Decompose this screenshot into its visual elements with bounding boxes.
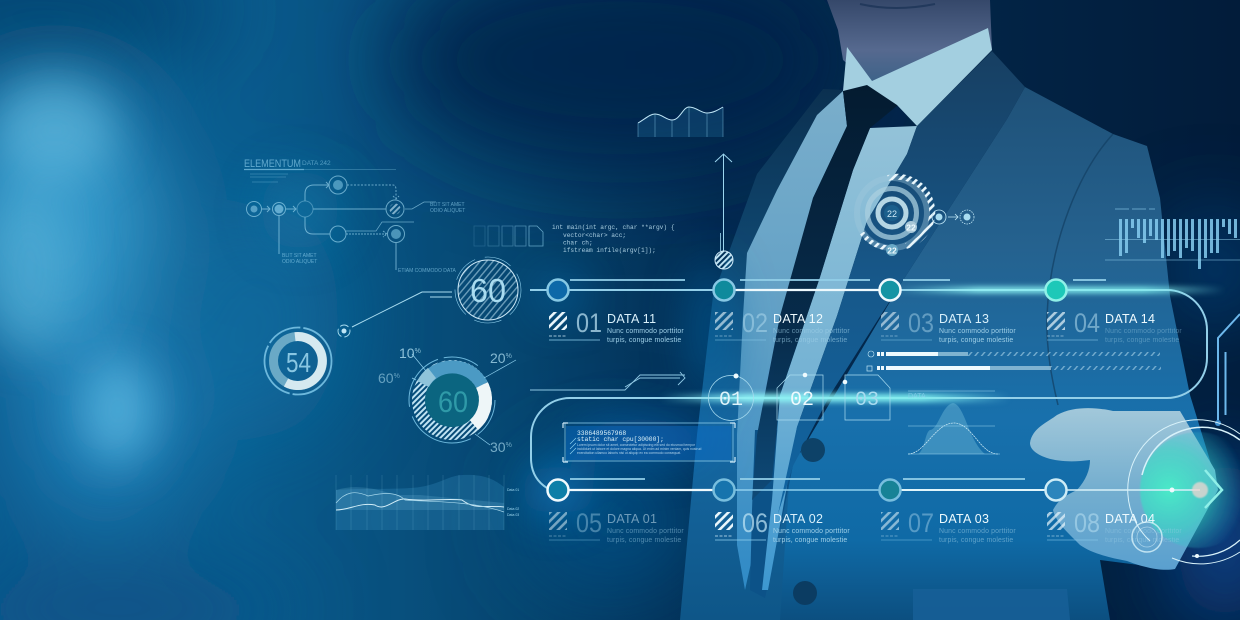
area chart: Data 02 [507,507,519,511]
code box: static char cpu[30000]; [577,436,664,443]
badge: 01 [708,374,754,420]
gauge: 54 [264,328,332,394]
item 08 [1047,508,1182,544]
item 08: 08 [1074,508,1100,538]
gauge labels: 10 [399,345,415,361]
item 07: turpis, congue molestie [939,537,1013,544]
buttons [801,438,825,462]
collar [843,28,992,126]
item 04: Nunc commodo porttitor [1105,328,1182,335]
item 08: turpis, congue molestie [1105,537,1179,544]
item 04 [1047,308,1182,344]
item 06: turpis, congue molestie [773,537,847,544]
item 03 text: DATA 13 [939,312,989,326]
badge: 02 [777,373,823,420]
item 02: 02 [742,308,768,338]
teal hand glow [1140,432,1240,548]
badge: 03 [843,375,890,420]
shirt left [737,91,847,590]
flow labels [282,202,465,274]
badge: 02: 02 [790,389,814,412]
target gauge: 22 [887,209,897,219]
gauge: 60 dial [455,257,521,323]
flow labels: ODIO ALIQUET [430,208,465,214]
target gauge: 22 [887,246,897,256]
flow labels: BLIT SIT AMET [282,253,317,259]
code box: 3386489567968 [577,430,626,437]
code snippet: int main(int argc, char **argv) { [552,224,675,231]
code snippet: char ch; [563,240,593,246]
item 03 text: turpis, congue molestie [939,337,1013,344]
panel: flow diagram [244,158,465,274]
code box [563,423,735,462]
businessman figure [680,0,1218,620]
item 05: turpis, congue molestie [607,537,681,544]
gauge: 60 percent donut: 60 [438,386,468,419]
item 03 text: Nunc commodo porttitor [939,328,1016,335]
item 01: Nunc commodo porttitor [607,328,684,335]
item 04 title: DATA 14 [1105,312,1155,326]
code box: Lorem ipsum dolor sit amet, consectetur adipiscing elit sed do eiusmod tempor [577,443,696,447]
small nodes [932,210,974,224]
connector line [338,292,452,337]
item 05: Nunc commodo porttitor [607,528,684,535]
item 04: turpis, congue molestie [1105,337,1179,344]
flow labels: ODIO ALIQUET [282,259,317,265]
suit left side [680,89,845,620]
gauge labels: % [394,373,400,380]
item 07 title: DATA 03 [939,512,989,526]
progress bars [867,351,1161,371]
target gauge [857,177,932,256]
code box: exercitation ullamco laboris nisi ut aliquip ex ea commodo consequat. [577,451,681,455]
item 03: 03 [908,308,934,338]
badge: 03: 03 [855,389,879,412]
item 05: DATA 01 [607,512,657,526]
area chart: Data 03 [507,513,519,517]
gauge labels: 60 [378,370,394,386]
code snippet: ifstream infile(argv[1]); [563,247,656,254]
sleeve seam [1047,134,1113,405]
item 02: turpis, congue molestie [773,337,847,344]
suit right body [780,87,1216,620]
item 02: Nunc commodo porttitor [773,328,850,335]
item 06: DATA 02 [773,512,823,526]
flow labels: ETIAM COMMODO DATA [398,268,457,274]
hand [1030,408,1218,570]
flow nodes [246,176,436,270]
gauge labels [378,345,512,455]
item 06: 06 [742,508,768,538]
area chart: Data 01 [507,488,519,492]
item 07 [881,508,1016,544]
item 05: 05 [576,508,602,538]
central glow overlays [534,260,732,514]
item 03 [881,308,934,340]
side circuit lines [1215,314,1240,426]
target gauge: 22 [906,222,916,232]
pocket [913,589,1070,620]
hand interface rings [1128,420,1240,564]
code box: incididunt ut labore et dolore magna aliqua. Ut enim ad minim veniam, quis nostrud [577,447,702,451]
short segments [570,280,1106,479]
item 01: DATA 11 [607,312,656,326]
heading: elementum [244,158,396,182]
heading: elementum: DATA 242 [302,160,331,167]
item 04: 04 [1074,308,1100,338]
badge: 01: 01 [719,389,743,412]
peak chart: DATA [908,393,926,400]
gauge labels: % [506,442,512,449]
peak chart [908,391,1000,454]
item 01 [549,308,684,344]
tie [752,85,898,500]
gauge: 60 percent donut [378,345,516,455]
top sparkline [638,107,723,137]
gauge: 60 dial: 60 [470,272,506,309]
item 06: Nunc commodo porttitor [773,528,850,535]
glowing segments [895,287,1225,293]
right lapel [778,51,1025,514]
neck and chin [827,0,992,100]
timeline track [530,280,1225,490]
item 02 title: DATA 12 [773,312,823,326]
code snippet: vector<char> acc; [563,232,626,239]
area chart [336,475,519,530]
gauge labels: % [506,353,512,360]
item 02 [715,308,850,344]
item 07: Nunc commodo porttitor [939,528,1016,535]
shirt right [762,126,917,590]
item 06 [715,508,850,544]
item 08: Nunc commodo porttitor [1105,528,1182,535]
item 07: 07 [908,508,934,538]
bar chart right [1105,209,1240,269]
gauge labels: 20 [490,350,506,366]
item 08 title: DATA 04 [1105,512,1155,526]
gauge labels: 30 [490,439,506,455]
item 05 [549,508,684,544]
gauge labels: % [415,348,421,355]
flow labels: BLIT SIT AMET [430,202,465,208]
file tabs icon [474,226,543,246]
item 03 text [939,312,1016,344]
code snippet [552,224,675,254]
timeline nodes row 1 [548,280,1066,300]
mouth shadow [860,4,935,8]
arrow up [715,154,733,269]
item 01: turpis, congue molestie [607,337,681,344]
timeline nodes row 2 [548,480,1066,500]
jacket closure [750,430,800,598]
item 01: 01 [576,308,602,338]
gauge: 54: 54 [286,347,311,378]
arrow: zigzag [530,372,685,390]
heading: elementum: ELEMENTUM [244,158,301,170]
